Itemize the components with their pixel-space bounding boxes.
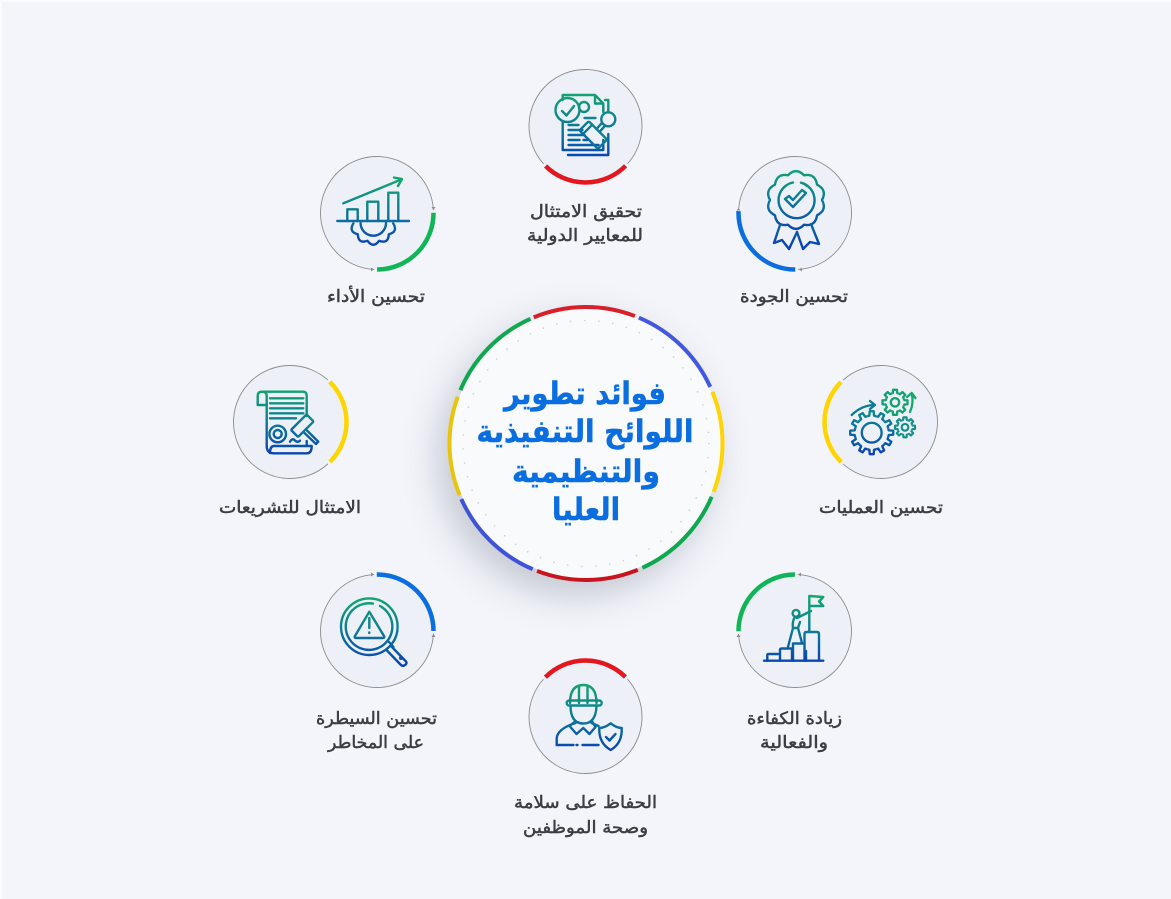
central title: فوائد تطوير — [502, 376, 666, 412]
panel: quality improvement — [734, 152, 856, 307]
label: تحقيق الامتثال — [530, 202, 642, 222]
label: تحسين العمليات — [819, 498, 943, 518]
label: وصحة الموظفين — [523, 818, 648, 838]
central white disc — [451, 308, 721, 578]
label — [747, 709, 842, 753]
icon: legal document with gavel — [210, 342, 370, 502]
panel: employee health and safety — [506, 637, 665, 838]
label: الامتثال للتشريعات — [219, 498, 361, 518]
central title — [476, 376, 694, 528]
label — [316, 709, 437, 753]
central title: اللوائح التنفيذية — [476, 414, 694, 450]
icon: growth chart with gear — [318, 154, 436, 272]
central segmented ring — [407, 265, 765, 622]
panel: performance improvement — [318, 154, 436, 307]
icon: quality badge — [734, 152, 856, 274]
label — [527, 202, 643, 246]
central circle shadow — [438, 320, 714, 596]
central title: والتنظيمية — [512, 454, 660, 490]
label: تحسين الجودة — [740, 287, 848, 307]
panel: process improvement — [820, 365, 943, 518]
label: الحفاظ على سلامة — [514, 793, 657, 813]
panel: legislation compliance — [210, 342, 370, 518]
label — [514, 793, 657, 838]
icon: worker with shield — [506, 637, 665, 797]
panel: central circle — [407, 265, 765, 622]
icon: document stamp — [506, 46, 665, 206]
icon: gears — [822, 365, 938, 479]
panel: international standards compliance — [506, 46, 665, 246]
icon: climber with flag — [736, 572, 854, 690]
label: للمعايير الدولية — [527, 226, 643, 246]
panel: risk control — [316, 572, 437, 753]
label: تحسين الأداء — [327, 286, 425, 307]
label: على المخاطر — [327, 733, 424, 753]
central title: العليا — [552, 492, 620, 528]
label: والفعالية — [760, 733, 828, 753]
panel: efficiency and effectiveness — [736, 572, 854, 753]
label: تحسين السيطرة — [316, 709, 437, 729]
icon: magnifier with warning — [318, 572, 436, 690]
label: زيادة الكفاءة — [747, 709, 842, 729]
